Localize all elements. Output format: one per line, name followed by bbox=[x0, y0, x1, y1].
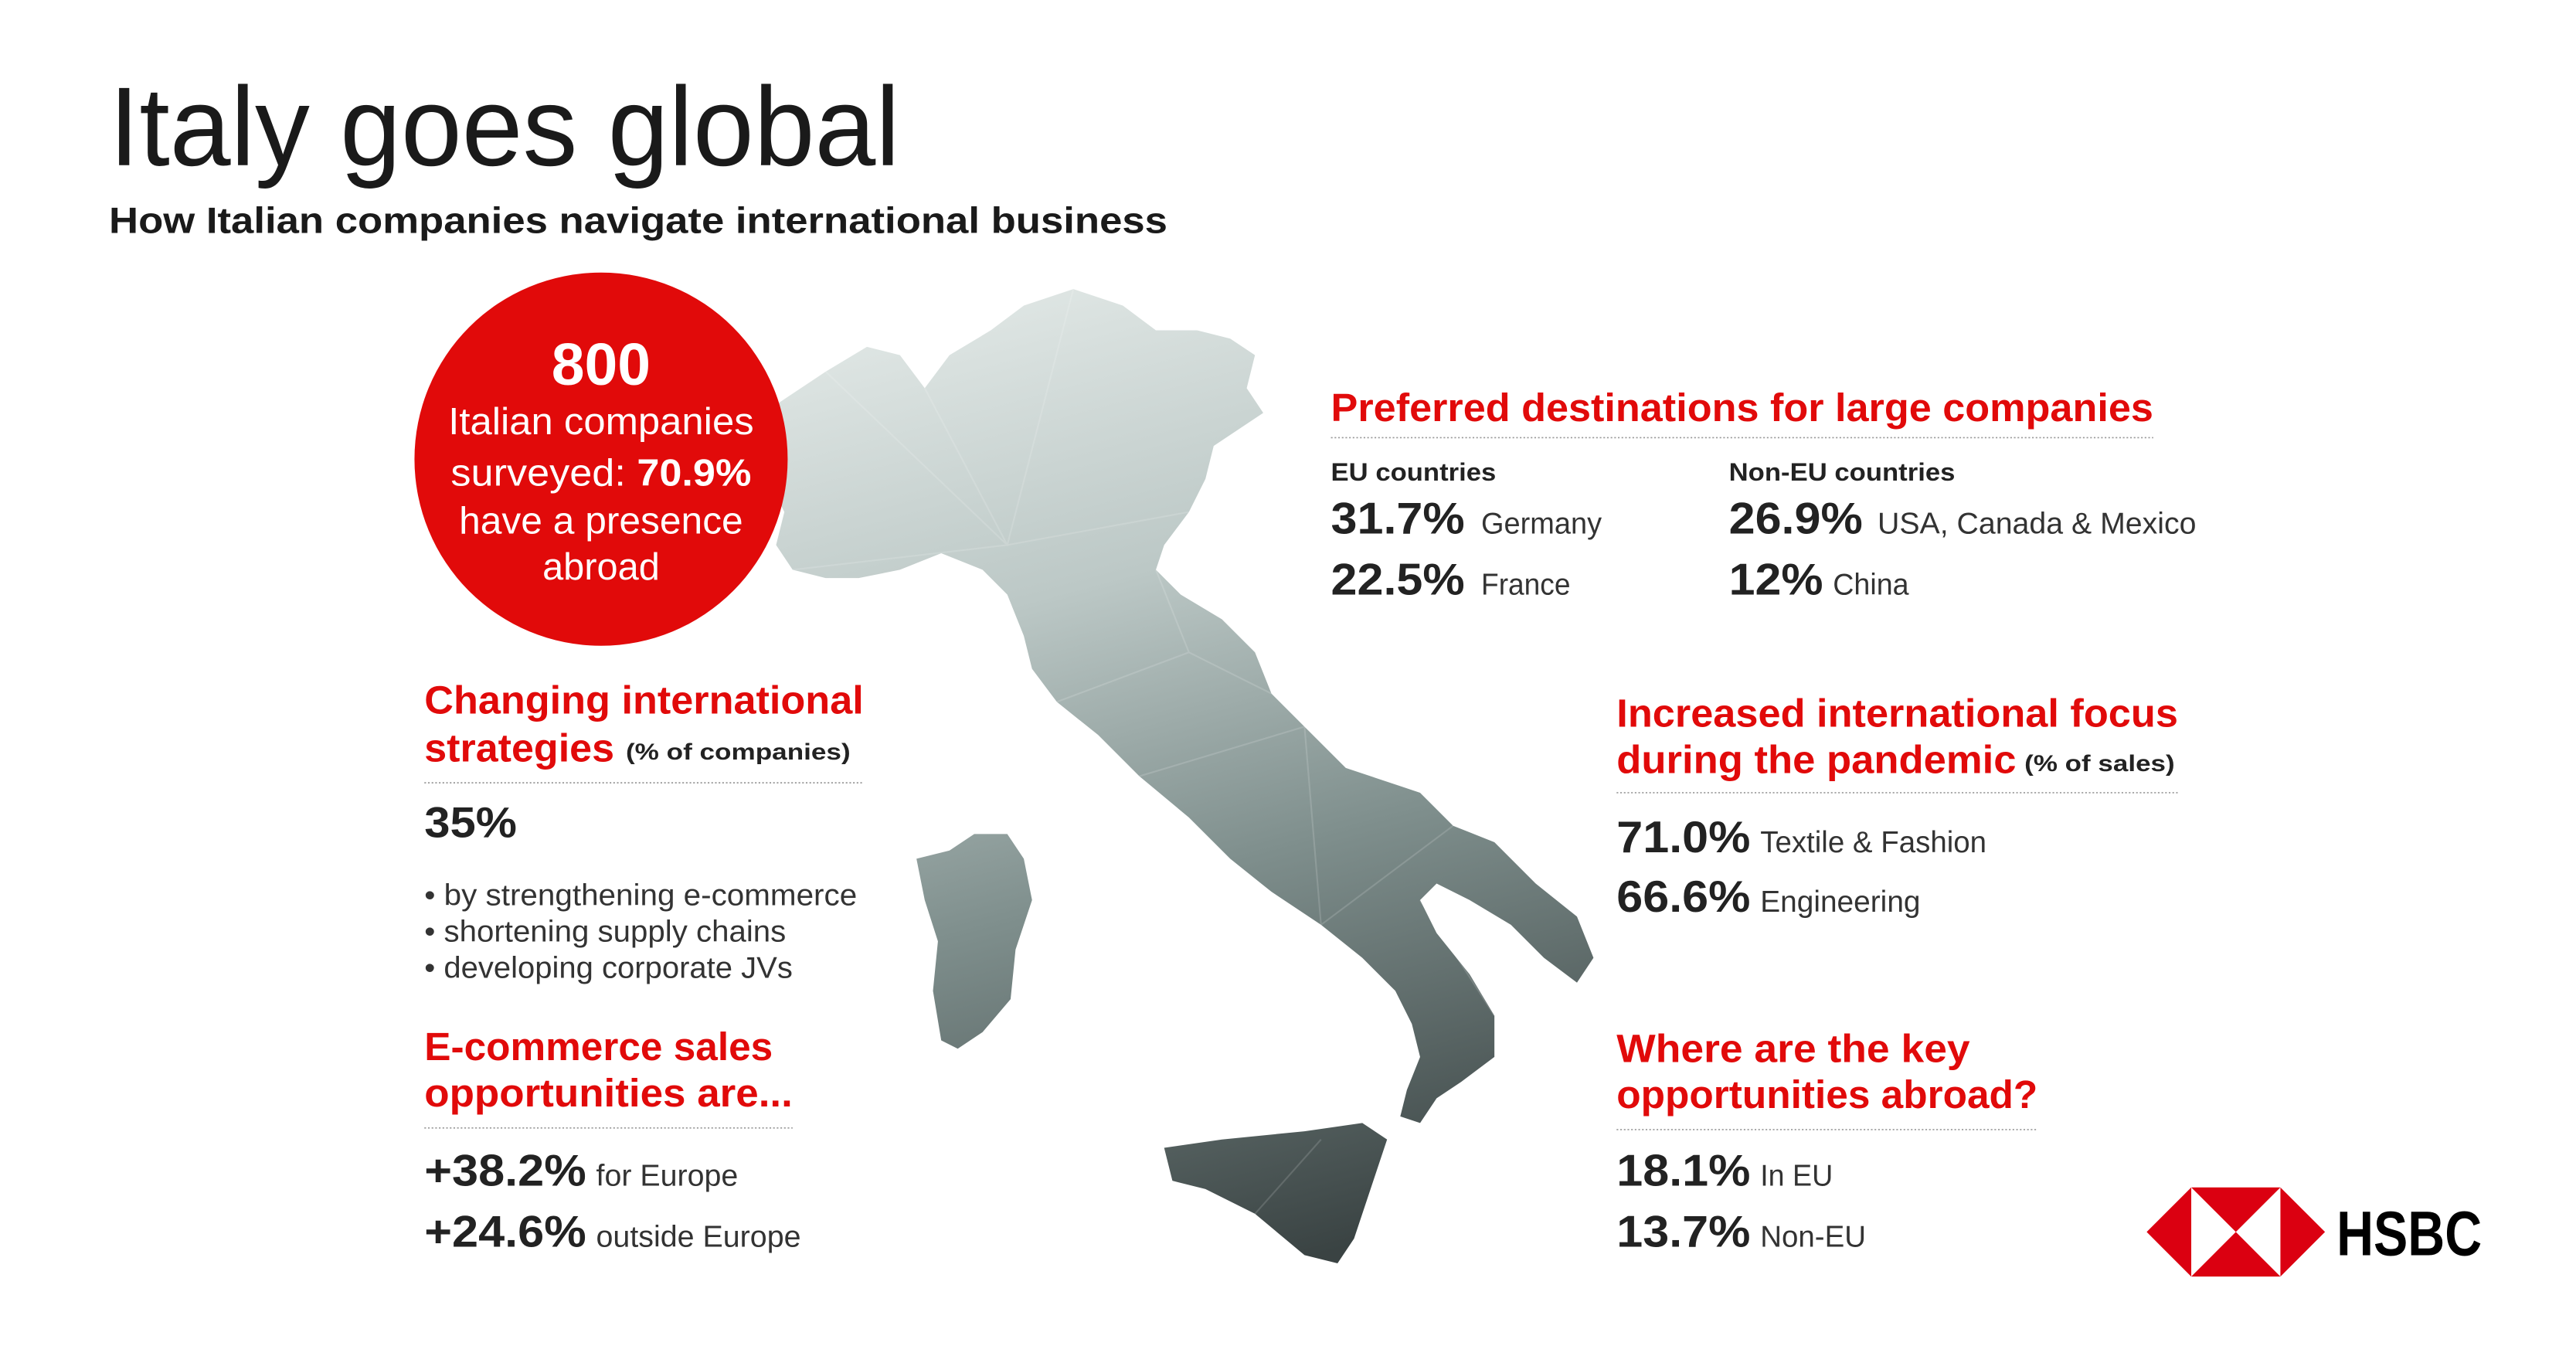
panel: preferred destinations: Non-EU countries bbox=[1729, 458, 1955, 486]
panel: changing strategies: • shortening supply chains bbox=[424, 915, 786, 948]
panel: pandemic focus: during the pandemic bbox=[1616, 737, 2016, 781]
panel: changing strategies: (% of companies) bbox=[626, 739, 851, 765]
panel: changing strategies: • developing corporate JVs bbox=[424, 951, 793, 984]
panel: preferred destinations: 26.9% bbox=[1729, 494, 1863, 543]
panel: changing strategies: strategies bbox=[424, 726, 614, 770]
panel: key opportunities: 18.1% bbox=[1616, 1147, 1750, 1196]
logo: HSBC: HSBC bbox=[2336, 1198, 2482, 1269]
panel: e-commerce bbox=[424, 1025, 801, 1257]
panel: e-commerce: outside Europe bbox=[596, 1221, 801, 1254]
panel: e-commerce: +38.2% bbox=[424, 1147, 586, 1196]
panel: pandemic focus: Increased international focus bbox=[1616, 691, 2178, 735]
panel: pandemic focus: 71.0% bbox=[1616, 813, 1750, 862]
subtitle: How Italian companies navigate international business bbox=[109, 199, 1167, 240]
panel: preferred destinations: Preferred destinations for large companies bbox=[1331, 386, 2153, 430]
panel: pandemic focus: (% of sales) bbox=[2024, 751, 2175, 777]
red circle callout: surveyed: 70.9% bbox=[450, 452, 751, 494]
panel: preferred destinations: 12% bbox=[1729, 555, 1823, 604]
panel: preferred destinations: 22.5% bbox=[1331, 555, 1465, 604]
panel: changing strategies: Changing international bbox=[424, 678, 864, 722]
panel: key opportunities: In EU bbox=[1760, 1160, 1833, 1193]
panel: key opportunities: 13.7% bbox=[1616, 1208, 1750, 1257]
logo: HSBC bbox=[2146, 1188, 2482, 1276]
panel: changing strategies: • by strengthening e-commerce bbox=[424, 879, 857, 912]
panel: key opportunities: opportunities abroad? bbox=[1616, 1072, 2037, 1117]
title: Italy goes global bbox=[109, 63, 900, 189]
panel: preferred destinations: EU countries bbox=[1331, 458, 1496, 486]
panel: preferred destinations bbox=[1331, 386, 2196, 604]
red circle callout: have a presence bbox=[459, 500, 743, 542]
panel: e-commerce: +24.6% bbox=[424, 1208, 586, 1257]
panel: e-commerce: opportunities are... bbox=[424, 1071, 793, 1115]
map: Italy bbox=[768, 289, 1593, 1263]
panel: changing strategies bbox=[424, 678, 864, 984]
red circle callout: Italian companies bbox=[448, 401, 754, 443]
panel: pandemic focus bbox=[1616, 691, 2178, 922]
panel: e-commerce: for Europe bbox=[596, 1160, 738, 1193]
panel: key opportunities: Non-EU bbox=[1760, 1221, 1866, 1254]
panel: preferred destinations: China bbox=[1833, 568, 1909, 601]
panel: preferred destinations: USA, Canada & Mexico bbox=[1878, 507, 2196, 540]
panel: pandemic focus: Textile & Fashion bbox=[1760, 826, 1986, 859]
red circle callout: abroad bbox=[542, 546, 660, 588]
panel: key opportunities bbox=[1616, 1026, 2037, 1257]
panel: preferred destinations: Germany bbox=[1481, 507, 1602, 540]
red circle callout bbox=[414, 273, 787, 646]
panel: changing strategies: 35% bbox=[424, 799, 517, 847]
panel: pandemic focus: Engineering bbox=[1760, 885, 1921, 919]
panel: preferred destinations: 31.7% bbox=[1331, 494, 1465, 543]
panel: e-commerce: E-commerce sales bbox=[424, 1025, 773, 1069]
red circle callout: 800 bbox=[552, 331, 651, 398]
panel: pandemic focus: 66.6% bbox=[1616, 872, 1750, 922]
panel: preferred destinations: France bbox=[1481, 568, 1570, 601]
panel: key opportunities: Where are the key bbox=[1616, 1026, 1970, 1070]
